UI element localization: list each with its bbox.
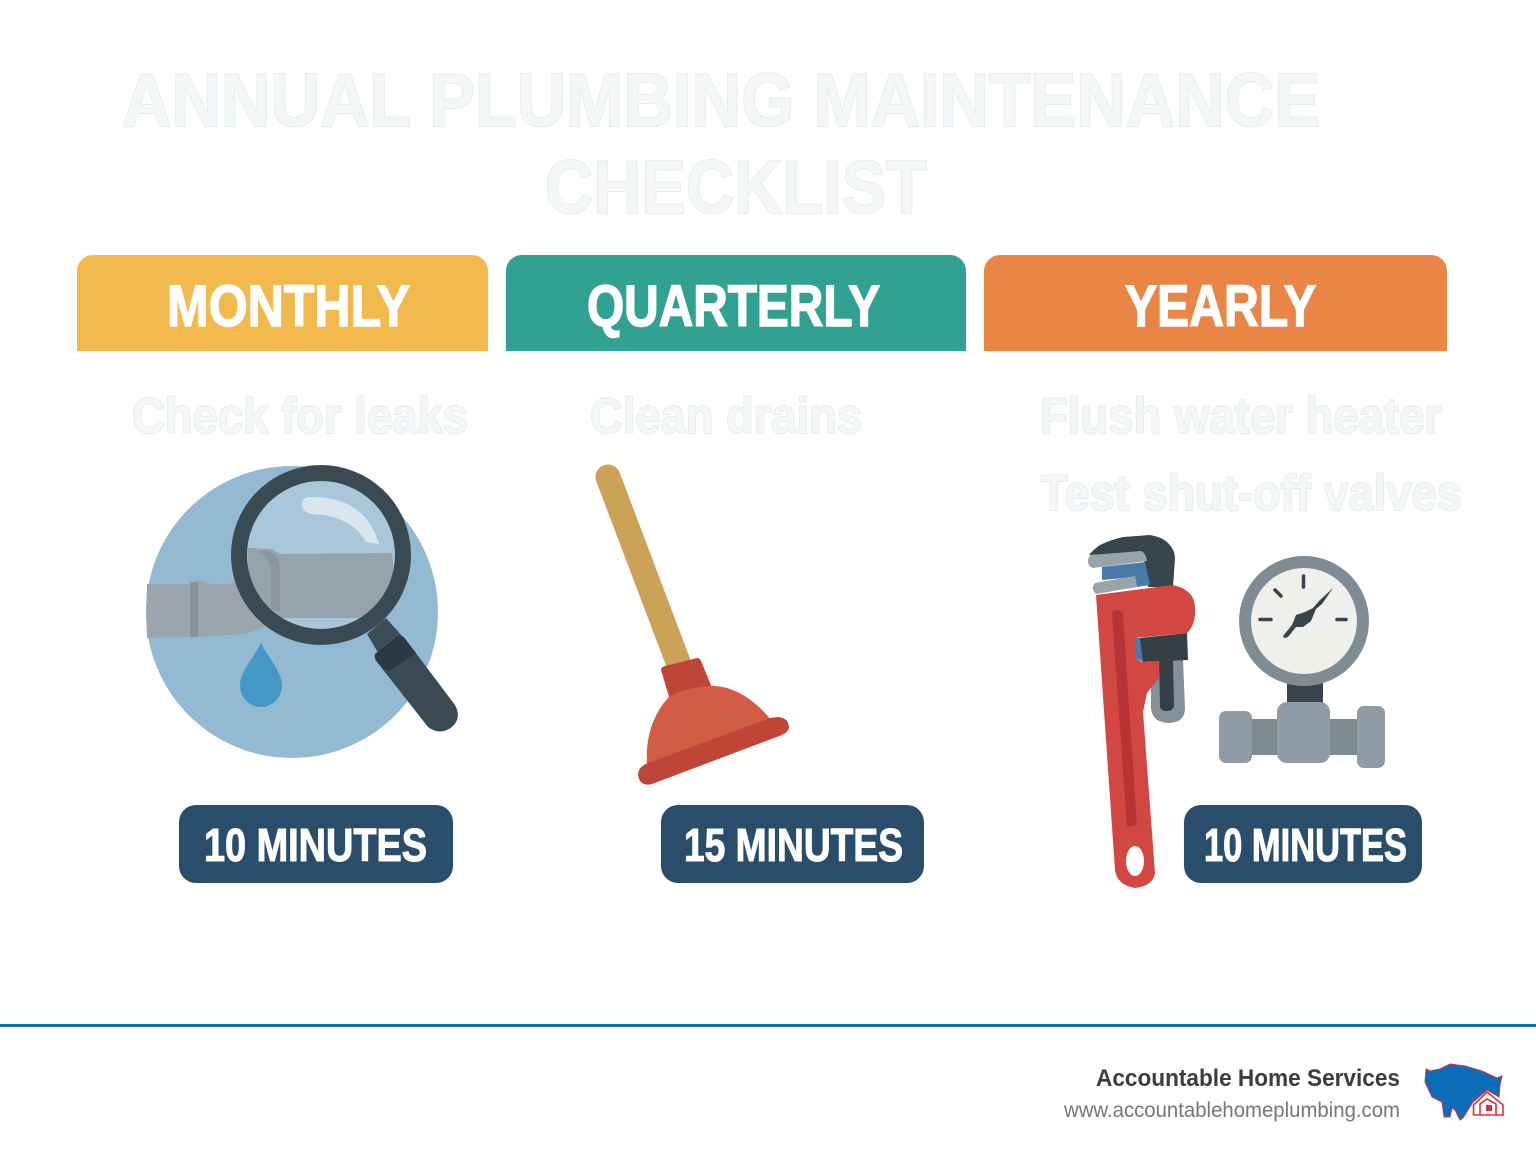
panel: yearly header: YEARLY bbox=[1125, 274, 1316, 339]
icon: leak inspection magnifier bbox=[146, 466, 458, 758]
leaking pipe bbox=[146, 578, 300, 638]
water drop bbox=[240, 643, 282, 707]
title bbox=[122, 58, 1320, 229]
text: yearly tasks: Test shut-off valves bbox=[1040, 465, 1462, 521]
badge: monthly time bbox=[179, 805, 453, 883]
footer website: www.accountablehomeplumbing.com bbox=[1063, 1099, 1400, 1122]
panel: monthly header: MONTHLY bbox=[167, 274, 410, 339]
title: CHECKLIST bbox=[545, 145, 927, 229]
panel: quarterly header bbox=[506, 255, 966, 351]
title: ANNUAL PLUMBING MAINTENANCE bbox=[122, 58, 1320, 142]
footer company name: Accountable Home Services bbox=[1096, 1065, 1400, 1092]
badge: quarterly time bbox=[661, 805, 924, 883]
panel: quarterly header: QUARTERLY bbox=[587, 274, 880, 339]
badge: quarterly time: 15 MINUTES bbox=[684, 819, 903, 871]
icon: pipe wrench bbox=[1088, 535, 1195, 888]
text: quarterly task: Clean drains bbox=[590, 388, 862, 444]
panel: monthly header bbox=[77, 255, 488, 351]
icon: company logo bbox=[1425, 1064, 1503, 1120]
icon: pressure gauge on valve bbox=[1219, 556, 1385, 768]
handle bbox=[367, 618, 402, 656]
panel: yearly header bbox=[984, 255, 1447, 351]
badge: yearly time: 10 MINUTES bbox=[1204, 819, 1407, 871]
icon: plunger bbox=[608, 477, 789, 785]
text: yearly tasks bbox=[1040, 388, 1462, 521]
text: monthly task: Check for leaks bbox=[132, 388, 468, 444]
lens bbox=[245, 479, 397, 631]
badge: monthly time: 10 MINUTES bbox=[204, 819, 427, 871]
text: yearly tasks: Flush water heater bbox=[1040, 388, 1442, 444]
badge: yearly time bbox=[1184, 805, 1422, 883]
